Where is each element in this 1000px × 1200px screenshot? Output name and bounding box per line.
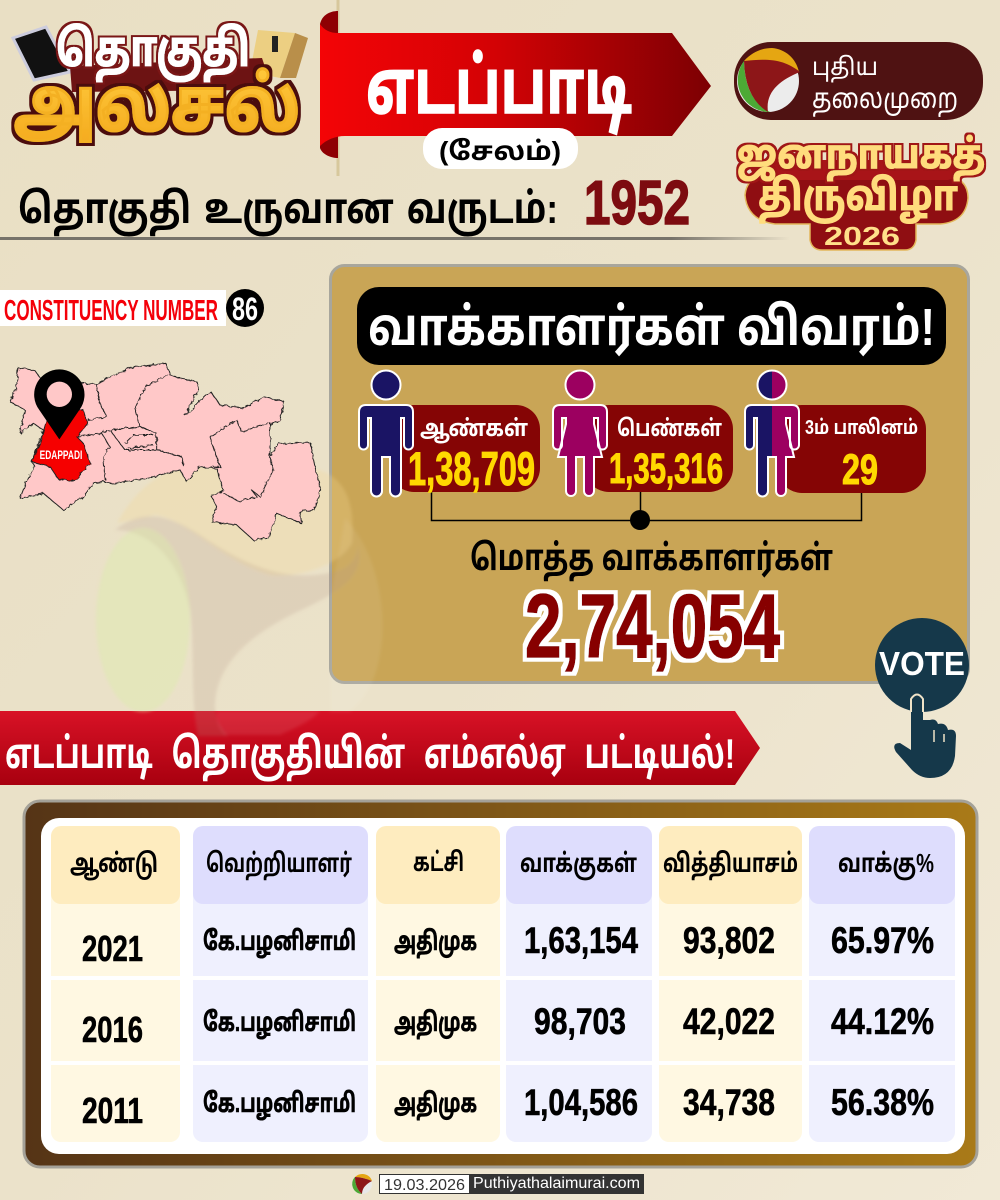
women: பெண்கள் [617, 415, 722, 441]
district pill [423, 128, 578, 169]
row 2016 [82, 1001, 934, 1050]
row 2016: 44.12% [831, 1001, 934, 1042]
third gender: 29 [842, 446, 878, 494]
row 2021: 2021 [82, 928, 143, 969]
logo: janayaga thiruvizha 2026 [737, 133, 985, 251]
panel: mla table [24, 801, 977, 1167]
row 2011: அதிமுக [394, 1088, 477, 1120]
icon: third gender figure [745, 370, 799, 496]
logo: janayaga thiruvizha 2026: திருவிழா [758, 172, 958, 224]
women: 1,35,316 [609, 445, 723, 493]
district pill: (சேலம்) [439, 136, 561, 166]
women [553, 370, 733, 496]
decorative horn [96, 465, 383, 736]
logo: puthiya thalaimurai [734, 42, 983, 120]
table header: வெற்றியாளர் [206, 848, 352, 881]
logo: puthiya thalaimurai: புதிய [812, 54, 878, 83]
footer: Puthiyathalaimurai.com [473, 1175, 640, 1192]
row 2011: 2011 [82, 1090, 143, 1131]
row 2016: 42,022 [683, 1001, 775, 1042]
connector [432, 490, 862, 530]
row 2011: கே.பழனிசாமி [203, 1088, 356, 1120]
title ribbon [320, 0, 711, 176]
icon: small emblem [352, 1174, 372, 1194]
row 2011: 1,04,586 [524, 1082, 638, 1123]
heading [357, 287, 946, 365]
table header [51, 826, 955, 904]
men: ஆண்கள் [420, 415, 528, 444]
table header: கட்சி [413, 847, 464, 877]
logo: janayaga thiruvizha 2026: 2026 [824, 221, 900, 251]
year formed line [18, 169, 690, 238]
icon: channel emblem [737, 48, 800, 112]
constituency number: 86 [232, 291, 258, 327]
row 2011: 56.38% [831, 1082, 934, 1123]
constituency name: எடப்பாடி [366, 45, 632, 135]
table header: வித்தியாசம் [663, 848, 798, 880]
third gender: 3ம் பாலினம் [805, 417, 918, 439]
total voters [470, 537, 833, 677]
banner: mla list heading: எடப்பாடி தொகுதியின் எம்எல்ஏ பட்டியல்! [5, 730, 735, 782]
banner shape [0, 711, 760, 785]
row 2021: 65.97% [831, 920, 934, 961]
table header: வாக்குகள் [520, 848, 637, 880]
logo word top: தொகுதி [56, 21, 250, 82]
footer [352, 1174, 644, 1194]
map of salem district [10, 363, 321, 540]
men [359, 370, 540, 496]
row 2016: அதிமுக [394, 1007, 477, 1039]
row 2016: கே.பழனிசாமி [203, 1007, 356, 1039]
table header: ஆண்டு [70, 848, 158, 881]
total voters: 2,74,054 [525, 577, 780, 677]
icon: ballot box [250, 30, 308, 78]
table row cells [51, 890, 955, 1142]
total voters: மொத்த வாக்காளர்கள் [470, 537, 833, 581]
table header: வாக்கு% [838, 848, 934, 880]
constituency number: CONSTITUENCY NUMBER [4, 295, 218, 327]
row 2021: 1,63,154 [524, 920, 638, 961]
icon: vote button [875, 618, 969, 778]
icon: map pin [34, 369, 84, 439]
row 2016: 2016 [82, 1009, 143, 1050]
year formed line: 1952 [584, 169, 690, 238]
panel: voter details content [357, 287, 946, 677]
logo: puthiya thalaimurai: தலைமுறை [812, 83, 958, 117]
logo word bottom: அலசல் [14, 63, 300, 146]
panel: voter details background [330, 266, 968, 682]
constituency number [0, 289, 264, 327]
icon: vote button: VOTE [879, 645, 965, 682]
icon: voter slip [13, 27, 70, 80]
men: 1,38,709 [408, 442, 535, 495]
logo: thoguthi alasal [13, 21, 308, 146]
row 2011: 34,738 [683, 1082, 775, 1123]
year formed line: தொகுதி உருவான வருடம்: [18, 185, 558, 237]
highlighted region: edappadi [32, 410, 90, 481]
row 2021 [82, 920, 934, 969]
icon: female figure [553, 370, 607, 496]
row 2021: அதிமுக [394, 926, 477, 958]
row 2016: 98,703 [534, 1001, 626, 1042]
third gender [745, 370, 926, 496]
icon: male figure [359, 370, 413, 496]
row 2021: 93,802 [683, 920, 775, 961]
region label: EDAPPADI [40, 448, 82, 462]
row 2021: கே.பழனிசாமி [203, 926, 356, 958]
footer: 19.03.2026 [384, 1177, 465, 1194]
row 2011 [82, 1082, 934, 1131]
